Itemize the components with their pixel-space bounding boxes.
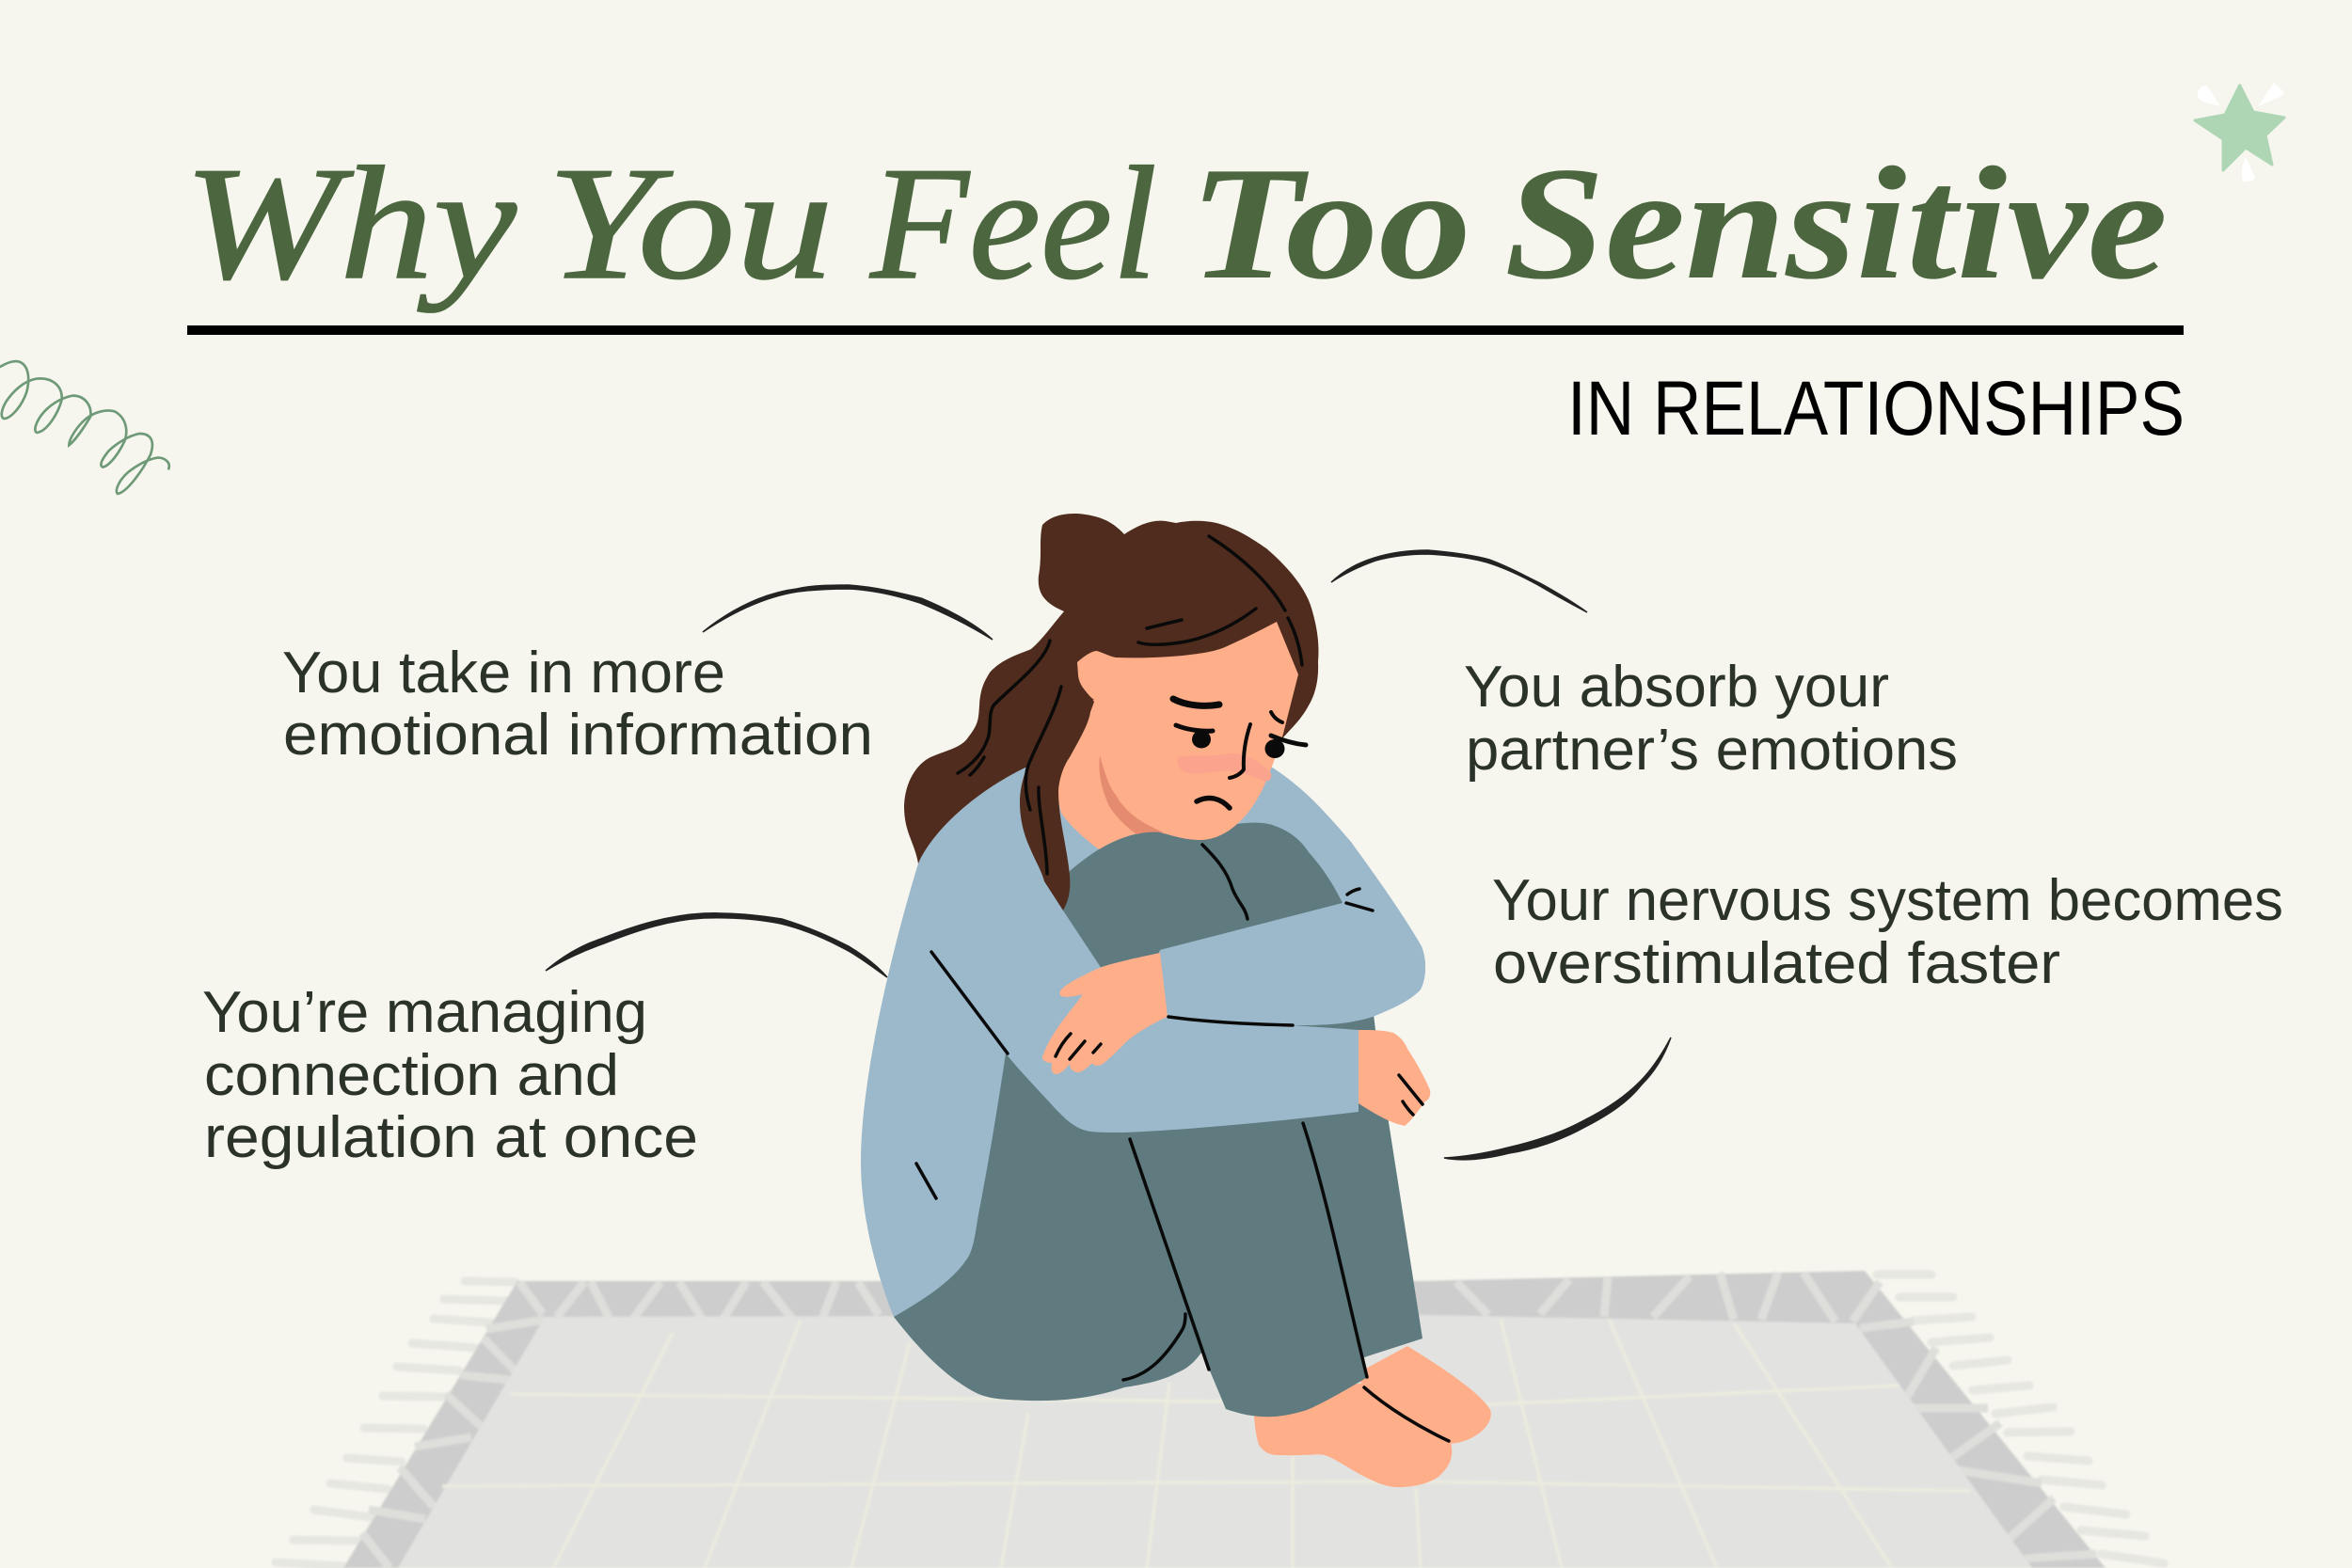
callout: you take in more emotional information <box>282 585 993 768</box>
title rule <box>187 325 2184 335</box>
left eye <box>1192 730 1211 749</box>
text: You’re managing <box>202 980 647 1045</box>
decorative star icon <box>2195 83 2284 182</box>
decorative green spiral <box>0 361 169 494</box>
callout: you're managing connection and regulation at once: regulation at once <box>204 1105 698 1170</box>
callout: you take in more emotional information: emotional information <box>283 703 873 768</box>
front hair lock <box>1020 658 1094 911</box>
callout: you absorb your partner's emotions <box>1331 550 1958 783</box>
title: Why <box>183 135 517 313</box>
knee <box>1063 823 1343 969</box>
woman sitting, hugging her knees <box>861 514 1491 1487</box>
curved stroke <box>1331 550 1587 612</box>
neck shadow <box>1099 755 1164 834</box>
title <box>183 135 2168 313</box>
left hand <box>1042 953 1168 1074</box>
facial features <box>1173 699 1306 808</box>
front foot <box>1254 1383 1452 1487</box>
subtitle: IN RELATIONSHIPS <box>1567 366 2185 451</box>
text: Your nervous system becomes <box>1492 868 2283 933</box>
right eyelash <box>1271 736 1306 745</box>
blush <box>1178 753 1271 781</box>
face and neck <box>1057 622 1298 849</box>
trousers and lower body <box>894 1006 1422 1417</box>
left eyelid <box>1176 725 1213 731</box>
callout: you're managing connection and regulation at once: connection and <box>204 1043 619 1108</box>
rug fringe <box>276 1275 2164 1566</box>
rug grid lines <box>442 1319 1970 1568</box>
back hair and bun <box>904 514 1318 903</box>
right eyebrow <box>1271 712 1282 722</box>
curved stroke <box>546 913 887 977</box>
curved stroke <box>703 585 993 640</box>
mouth <box>1197 798 1230 808</box>
rug border <box>343 1271 2106 1568</box>
right hand <box>1359 1030 1430 1126</box>
callout: your nervous system becomes overstimulated faster: overstimulated faster <box>1493 931 2060 996</box>
text: You absorb your <box>1464 655 1889 720</box>
title: You <box>547 135 834 313</box>
forearm <box>1160 875 1425 1025</box>
curved stroke <box>1444 1037 1671 1160</box>
title: Too <box>1189 135 1471 313</box>
rug <box>276 1271 2164 1568</box>
callout: you're managing connection and regulation at once <box>202 913 887 1170</box>
hair strands <box>958 536 1302 874</box>
nose <box>1230 724 1250 778</box>
rug centre <box>398 1315 2032 1568</box>
callout: you absorb your partner's emotions: partner’s emotions <box>1466 718 1958 783</box>
sweater body and arm <box>861 752 1425 1317</box>
rug border pattern <box>362 1273 2096 1568</box>
clothing and hand crease lines <box>916 845 1449 1441</box>
left eyebrow <box>1173 699 1219 705</box>
title: Feel <box>869 135 1157 313</box>
callout: your nervous system becomes overstimulated faster <box>1444 868 2283 1160</box>
text: You take in more <box>282 641 725 705</box>
right eye <box>1264 739 1285 758</box>
back foot <box>1352 1346 1491 1444</box>
title: Sensitive <box>1504 135 2168 313</box>
